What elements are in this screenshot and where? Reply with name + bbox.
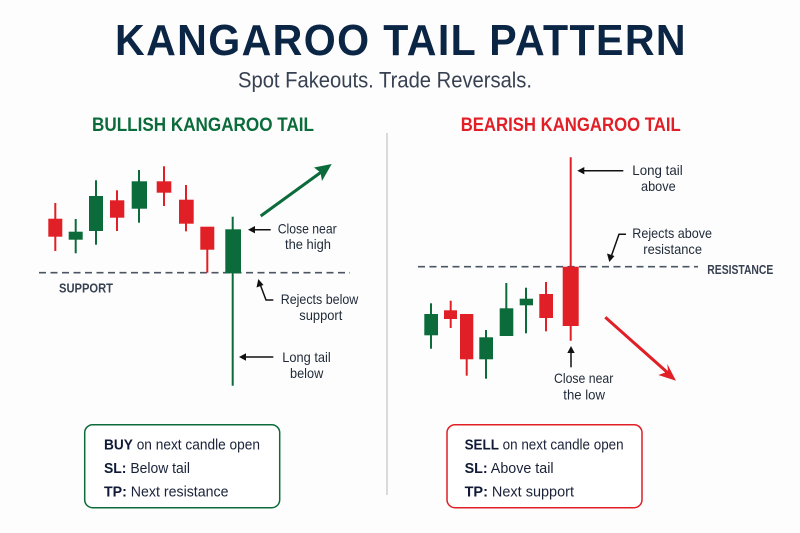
- callout: rejects below support: [256, 279, 359, 323]
- bearish candlestick chart: [424, 157, 579, 379]
- resistance label: RESISTANCE: [707, 263, 773, 277]
- callout: close near the low: Close near: [554, 370, 614, 386]
- bullish candlestick chart: [48, 166, 241, 386]
- arrow: bullish move up: [261, 164, 332, 216]
- title: KANGAROO TAIL PATTERN: [115, 16, 687, 65]
- support line: [39, 272, 350, 274]
- bearish heading: BEARISH KANGAROO TAIL: [461, 114, 681, 136]
- callout: long tail above: above: [641, 178, 676, 194]
- callout: long tail below: [239, 349, 331, 381]
- arrow: bearish move down: [605, 317, 676, 381]
- callout: rejects above resistance: resistance: [643, 241, 702, 257]
- support label: SUPPORT: [59, 282, 113, 296]
- callout: long tail above: Long tail: [632, 162, 683, 178]
- kangaroo tail candle: [563, 157, 579, 341]
- bullish heading: BULLISH KANGAROO TAIL: [92, 114, 314, 136]
- trade plan: buy: SL: Below tail: [104, 460, 190, 477]
- callout: rejects above resistance: Rejects above: [632, 225, 712, 241]
- callout: close near the high: [248, 220, 337, 252]
- callout: long tail below: below: [290, 365, 324, 381]
- callout: close near the low: [554, 346, 614, 402]
- trade plan: sell: TP: Next support: [465, 484, 575, 500]
- trade plan: sell: SL: Above tail: [465, 460, 554, 477]
- kangaroo tail candle: [225, 217, 241, 386]
- subtitle: Spot Fakeouts. Trade Reversals.: [238, 68, 532, 92]
- trade plan: sell: SELL on next candle open: [465, 436, 624, 453]
- trade plan: sell: [447, 425, 642, 508]
- trade plan: buy: BUY on next candle open: [104, 436, 260, 453]
- trade plan: buy: [85, 425, 280, 508]
- callout: close near the low: the low: [563, 386, 606, 402]
- callout: close near the high: Close near: [278, 220, 337, 236]
- callout: rejects above resistance: [607, 225, 712, 262]
- callout: long tail below: Long tail: [282, 349, 331, 365]
- callout: rejects below support: support: [299, 307, 342, 323]
- resistance line: [418, 266, 698, 268]
- callout: rejects below support: Rejects below: [281, 291, 359, 307]
- trade plan: buy: TP: Next resistance: [104, 484, 228, 500]
- callout: long tail above: [577, 162, 683, 194]
- panel divider: [386, 133, 388, 495]
- panel: bullish kangaroo tail: [39, 114, 359, 508]
- callout: close near the high: the high: [285, 236, 331, 252]
- panel: bearish kangaroo tail: [418, 114, 773, 508]
